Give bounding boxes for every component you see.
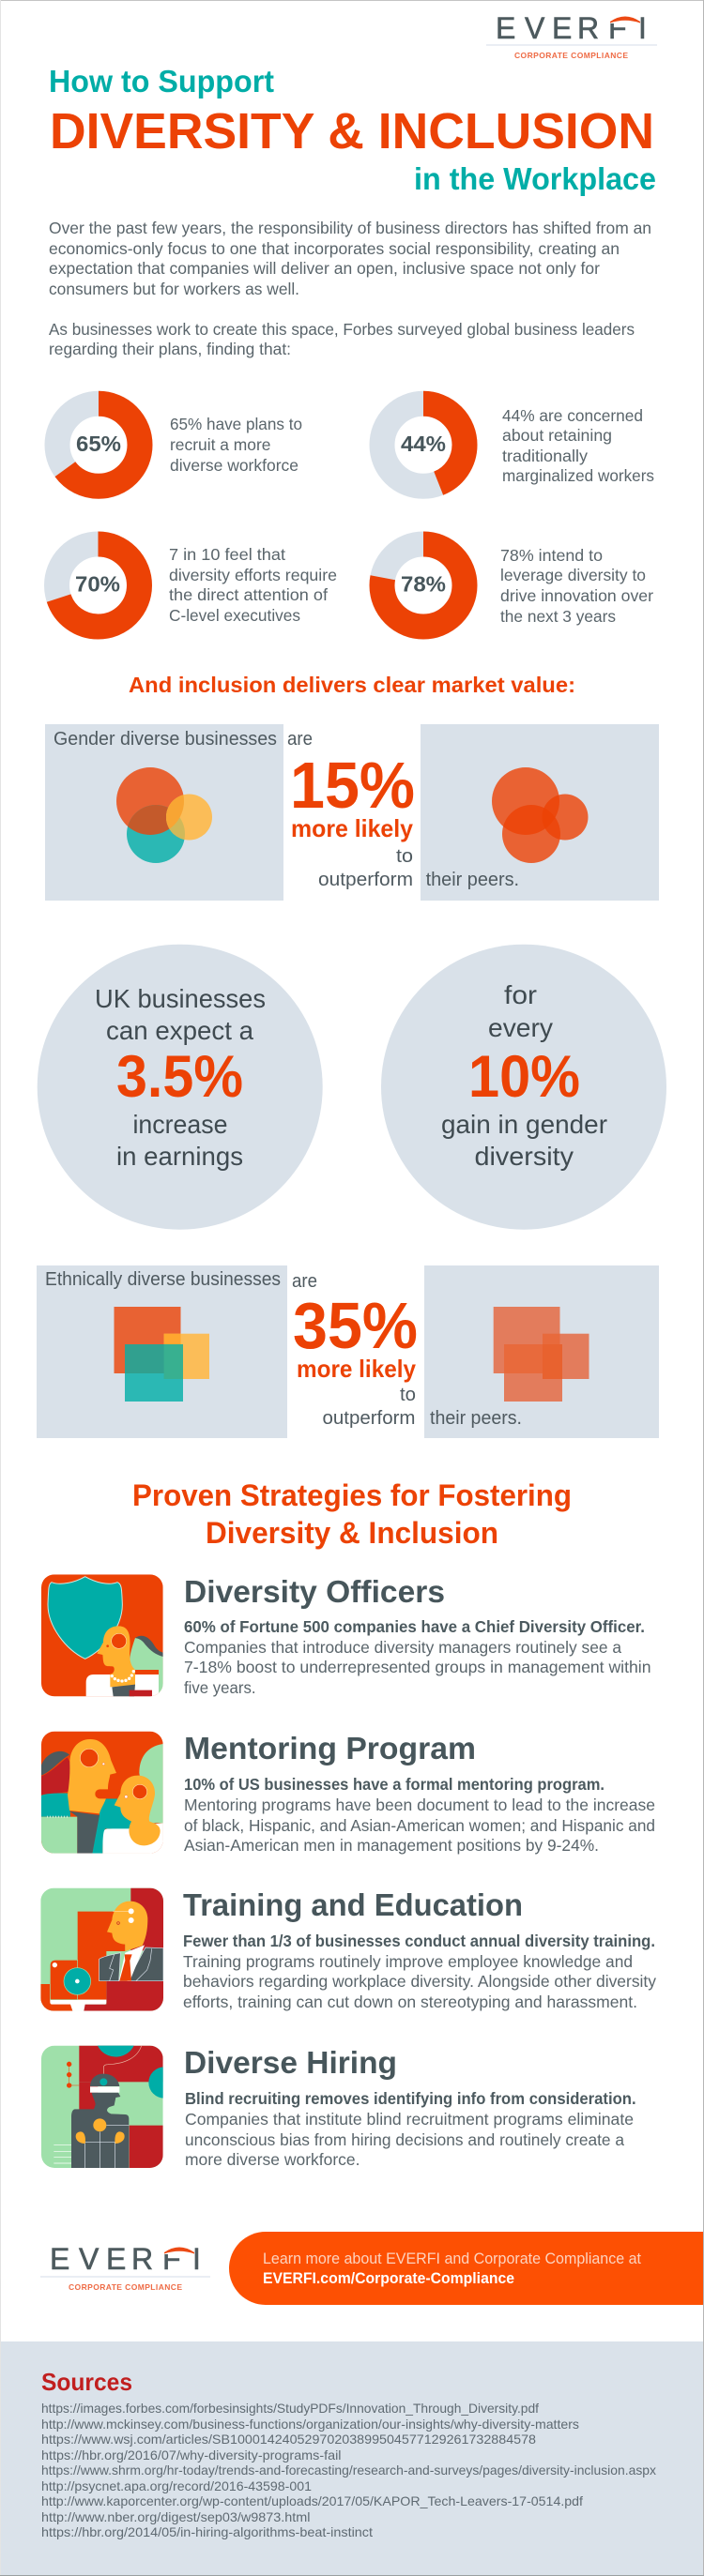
title: How to Support	[49, 64, 274, 98]
text: training and education	[183, 1887, 656, 2011]
panel: sources: Sources	[41, 2368, 132, 2396]
logo: EVERFI header: CORPORATE COMPLIANCE	[514, 51, 628, 60]
callout: gender diversity circle	[381, 945, 666, 1230]
stat: 70% donut: 7 in 10 feel that	[169, 545, 285, 564]
intro text: economics-only focus to one that incorporates social responsibility, creating an	[49, 239, 620, 258]
title: in the Workplace	[414, 161, 656, 196]
text: diverse hiring	[184, 2045, 636, 2169]
panel: ethnically diverse businesses: are	[292, 1271, 317, 1292]
call to action banner	[229, 2232, 704, 2305]
icon: mentoring program	[41, 1732, 163, 1854]
logo: EVERFI header: EVERFI	[496, 11, 647, 45]
stat: 44% donut: 44%	[401, 432, 446, 456]
icon: orange squares	[494, 1307, 589, 1402]
intro text: consumers but for workers as well.	[49, 280, 299, 298]
logo: EVERFI footer: EVERFI	[50, 2242, 201, 2276]
panel: sources: https://www.wsj.com/articles/SB10001424052970203899504577129261732884578	[41, 2432, 536, 2447]
icon: colored squares	[115, 1307, 209, 1402]
icon: diverse hiring	[41, 2045, 163, 2168]
text: diversity officers	[184, 1574, 651, 1697]
text: diversity officers: five years.	[184, 1678, 255, 1697]
panel: sources: http://www.mckinsey.com/business-functions/organization/our-insights/why-diversity-matters	[41, 2417, 579, 2432]
stat: 78% donut	[382, 544, 653, 627]
text: diversity officers: 60% of Fortune 500 companies have a Chief Diversity Officer.	[184, 1617, 645, 1636]
stat: 65% donut: 65%	[76, 432, 121, 456]
stat: 65% donut: recruit a more	[170, 435, 270, 454]
callout: UK businesses circle: increase	[133, 1110, 227, 1139]
panel: gender diverse businesses: their peers.	[426, 870, 519, 890]
panel: sources: https://www.shrm.org/hr-today/trends-and-forecasting/research-and-surveys/pages/diversity-inclusion.aspx	[41, 2462, 656, 2478]
panel: ethnically diverse businesses: their peers.	[430, 1408, 522, 1429]
text: training and education: Training programs routinely improve employee knowledge and	[183, 1952, 633, 1971]
text: mentoring program: Mentoring programs have been document to lead to the increase	[184, 1796, 655, 1814]
panel: gender diverse businesses: are	[287, 729, 313, 750]
callout: UK businesses circle: can expect a	[106, 1016, 253, 1045]
stat: 44% donut: 44% are concerned	[502, 406, 643, 425]
text: diverse hiring: more diverse workforce.	[185, 2150, 360, 2169]
stat: 65% donut	[57, 403, 302, 486]
text: diverse hiring: unconscious bias from hiring decisions and routinely create a	[185, 2130, 624, 2149]
text: diversity officers: 7-18% boost to underrepresented groups in management within	[184, 1658, 651, 1676]
callout: gender diversity circle: diversity	[475, 1142, 574, 1171]
stat: 70% donut	[56, 544, 337, 627]
icon: training and education	[40, 1888, 163, 2011]
panel: gender diverse businesses: to	[396, 846, 413, 867]
callout: gender diversity circle: gain in gender	[441, 1110, 607, 1139]
panel: sources: https://images.forbes.com/forbesinsights/StudyPDFs/Innovation_Through_Diversity.pdf	[41, 2401, 539, 2416]
panel: gender diverse businesses	[45, 724, 659, 901]
panel: gender diverse businesses: outperform	[318, 870, 413, 890]
text: mentoring program: of black, Hispanic, and Asian-American women; and Hispanic and	[184, 1816, 655, 1835]
panel: sources: https://hbr.org/2016/07/why-diversity-programs-fail	[41, 2447, 342, 2462]
stat: 78% donut: leverage diversity to	[500, 566, 646, 584]
panel: ethnically diverse businesses: to	[400, 1385, 416, 1405]
text: training and education: efforts, training can cut down on stereotyping and harassment.	[183, 1993, 637, 2011]
icon: colored circles	[116, 767, 212, 863]
text: training and education: Training and Education	[183, 1887, 523, 1922]
text: diversity officers: Diversity Officers	[184, 1574, 445, 1609]
call to action banner: Learn more about EVERFI and Corporate Compliance at	[263, 2250, 641, 2267]
text: mentoring program: 10% of US businesses have a formal mentoring program.	[184, 1775, 605, 1794]
panel: gender diverse businesses: 15%	[290, 749, 415, 822]
callout: gender diversity circle: for	[504, 980, 537, 1009]
icon: orange circles	[492, 767, 588, 863]
stat: 65% donut: diverse workforce	[170, 456, 298, 475]
text: diversity officers: Companies that introduce diversity managers routinely see a	[184, 1638, 621, 1657]
stat: 44% donut: traditionally	[502, 447, 588, 465]
stat: 44% donut: marginalized workers	[502, 466, 654, 485]
title	[49, 64, 656, 196]
stat: 78% donut: drive innovation over	[500, 586, 653, 605]
panel: sources: https://hbr.org/2014/05/in-hiring-algorithms-beat-instinct	[41, 2524, 373, 2539]
title: DIVERSITY & INCLUSION	[50, 103, 654, 159]
callout: UK businesses circle: UK businesses	[95, 984, 266, 1013]
text: training and education: behaviors regarding workplace diversity. Alongside other diversity	[183, 1972, 656, 1991]
heading: market value: And inclusion delivers clear market value:	[129, 673, 575, 697]
stat: 78% donut: 78% intend to	[500, 546, 603, 565]
text: diverse hiring: Blind recruiting removes identifying info from consideration.	[185, 2089, 636, 2108]
call to action banner: EVERFI.com/Corporate-Compliance	[263, 2269, 514, 2287]
stat: 44% donut: about retaining	[502, 426, 612, 445]
intro text: As businesses work to create this space, Forbes surveyed global business leaders	[49, 320, 635, 339]
text: diverse hiring: Diverse Hiring	[184, 2045, 397, 2080]
stat: 44% donut	[382, 403, 654, 486]
intro text	[49, 219, 651, 358]
panel: sources: http://www.nber.org/digest/sep03/w9873.html	[41, 2509, 310, 2524]
panel: ethnically diverse businesses: outperform	[323, 1408, 415, 1429]
callout: UK businesses circle: 3.5%	[116, 1044, 243, 1110]
panel: sources	[0, 2341, 704, 2576]
panel: ethnically diverse businesses: 35%	[293, 1289, 418, 1362]
text: mentoring program: Mentoring Program	[184, 1731, 476, 1765]
stat: 70% donut: the direct attention of	[169, 585, 328, 604]
panel: gender diverse businesses: more likely	[291, 814, 414, 842]
panel: sources: http://www.kaporcenter.org/wp-content/uploads/2017/05/KAPOR_Tech-Leavers-17-0514.pdf	[41, 2493, 583, 2508]
logo: EVERFI footer	[40, 2242, 210, 2292]
panel: ethnically diverse businesses: more likely	[297, 1355, 416, 1383]
stat: 70% donut: diversity efforts require	[169, 566, 337, 584]
panel: ethnically diverse businesses: Ethnically diverse businesses	[45, 1269, 281, 1290]
intro text: regarding their plans, finding that:	[49, 340, 291, 358]
text: diverse hiring: Companies that institute blind recruitment programs eliminate	[185, 2110, 634, 2129]
callout: gender diversity circle: 10%	[468, 1044, 580, 1110]
panel: gender diverse businesses: Gender diverse businesses	[54, 729, 277, 750]
intro text: Over the past few years, the responsibility of business directors has shifted from an	[49, 219, 651, 237]
heading: proven strategies: Diversity & Inclusion	[206, 1516, 498, 1550]
heading: proven strategies: Proven Strategies for Fostering	[132, 1478, 572, 1512]
stat: 65% donut: 65% have plans to	[170, 415, 302, 433]
text: mentoring program	[184, 1731, 655, 1855]
intro text: expectation that companies will deliver an open, inclusive space not only for	[49, 259, 600, 278]
callout: UK businesses circle: in earnings	[116, 1142, 243, 1171]
callout: UK businesses circle	[38, 945, 323, 1230]
panel: ethnically diverse businesses	[37, 1265, 659, 1438]
icon: diversity officers	[41, 1574, 163, 1696]
text: mentoring program: Asian-American men in management positions by 9-24%.	[184, 1836, 599, 1855]
panel: sources: http://psycnet.apa.org/record/2016-43598-001	[41, 2478, 312, 2493]
stat: 70% donut: C-level executives	[169, 606, 300, 625]
text: training and education: Fewer than 1/3 of businesses conduct annual diversity training.	[183, 1932, 655, 1950]
stat: 70% donut: 70%	[75, 572, 120, 597]
heading: proven strategies	[132, 1478, 572, 1550]
logo: EVERFI header	[486, 11, 657, 60]
callout: gender diversity circle: every	[488, 1013, 553, 1042]
stat: 78% donut: 78%	[401, 572, 446, 597]
logo: EVERFI footer: CORPORATE COMPLIANCE	[69, 2282, 182, 2292]
stat: 78% donut: the next 3 years	[500, 607, 616, 626]
